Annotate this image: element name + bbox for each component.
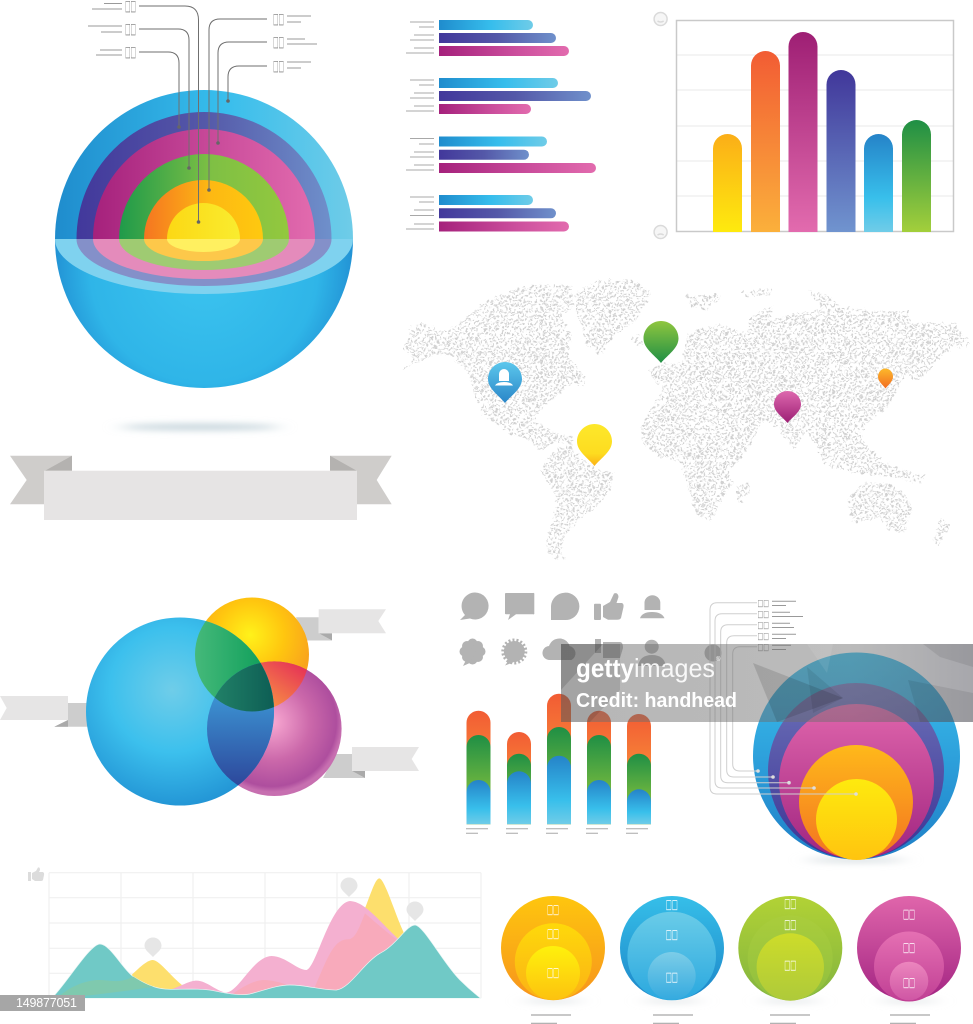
horizontal bar chart groups [406,20,596,232]
map pin: blue person [488,362,522,403]
band facets [561,644,973,722]
nested circles [753,652,960,860]
watermark band [561,644,973,722]
leader labels: □□ [273,10,284,28]
venn circles [86,598,342,806]
labels: □□ [758,642,769,653]
labels: □□ [758,609,769,620]
leader labels [88,0,317,74]
ribbon: upper right [296,609,386,640]
labels: □□ [758,598,769,609]
stacked bar chart [466,694,651,833]
ribbon: left [0,696,88,727]
icon: burst bubble [503,640,526,666]
bar group 4 [439,195,569,232]
sphere upper layers [55,90,353,239]
sphere shadow [120,424,280,430]
watermark logo: images [634,653,715,683]
stack 5 [627,714,651,824]
vertical column chart [654,12,954,238]
leader labels: □□ [273,32,284,50]
stack 4 [587,711,611,824]
orange circle [501,896,605,1000]
icon: sad face [654,226,667,238]
area series [52,878,481,998]
leader labels: □□ [125,20,136,38]
bar group 1 [439,20,569,56]
stack 1 [466,711,490,824]
green circle [738,896,842,1001]
icon: rectangular speech bubble [505,593,534,620]
blue circle: □□ [666,897,678,912]
sphere cut face [55,239,353,294]
pink circle: □□ [903,940,915,955]
icon: happy face [654,12,667,26]
blank ribbon banner [10,456,392,520]
orange circle: □□ [547,926,559,941]
leader lines [710,603,858,796]
green circle: □□ [784,896,796,911]
image id tag [0,995,85,1011]
watermark logo: ® [716,656,721,663]
labels: □□ [758,620,769,631]
green circle: □□ [784,917,796,932]
pink circle: □□ [903,907,915,922]
sphere lower half [55,239,353,388]
icon: cloud [542,638,576,660]
watermark credit: Credit: handhead [576,690,737,712]
dotted world map [402,280,971,560]
pink circle [857,896,961,1002]
green circle: □□ [784,958,796,973]
circle shadow [806,858,906,862]
venn diagram with ribbons [0,598,419,806]
orange circle: □□ [547,902,559,917]
blue circle [620,896,724,1000]
icon: person two [638,640,666,666]
stack 3 [547,694,571,824]
stack 2 [507,732,531,824]
leader lines and dots [139,6,267,224]
ribbon: lower right [323,747,419,778]
chart frame and gridlines [676,20,954,232]
circle captions [531,1015,930,1023]
blue circle: □□ [666,970,678,985]
icon: faint thumbs up [28,867,44,881]
labels [758,598,803,653]
map pin: yellow [577,424,612,466]
icon: faint bubble [704,644,722,662]
pink circle: □□ [903,975,915,990]
chart marker pins [144,878,424,957]
map pin: pink [774,391,801,423]
map pin: green [644,321,678,363]
stack captions [466,829,648,833]
icon: person [640,595,664,618]
watermark logo: getty [576,653,634,683]
nested circle set [501,896,961,1023]
icon: briefcase thumb [595,639,623,658]
leader labels: □□ [125,42,136,60]
icon: thumbs up [594,593,624,620]
map continents [402,280,971,560]
bar group 3 [439,136,596,173]
concentric circle diagram [710,598,960,862]
labels: □□ [758,631,769,642]
icon: speech drop bubble [551,593,579,620]
icon set [460,592,722,666]
icon: round speech bubble [460,592,489,620]
image id tag: 149877051 [16,996,77,1010]
map pin: orange [878,368,893,388]
bar group 2 [439,78,591,114]
column bars [713,32,931,232]
blue circle: □□ [666,927,678,942]
watermark logo [576,653,721,683]
icon: flower bubble [460,638,486,666]
leader labels: □□ [273,56,284,74]
orange circle: □□ [547,965,559,980]
shadows [523,999,939,1003]
area chart [28,867,481,998]
bar caption dashes [406,22,434,229]
sphere cross-section diagram [55,0,353,430]
chart grid [49,873,481,998]
